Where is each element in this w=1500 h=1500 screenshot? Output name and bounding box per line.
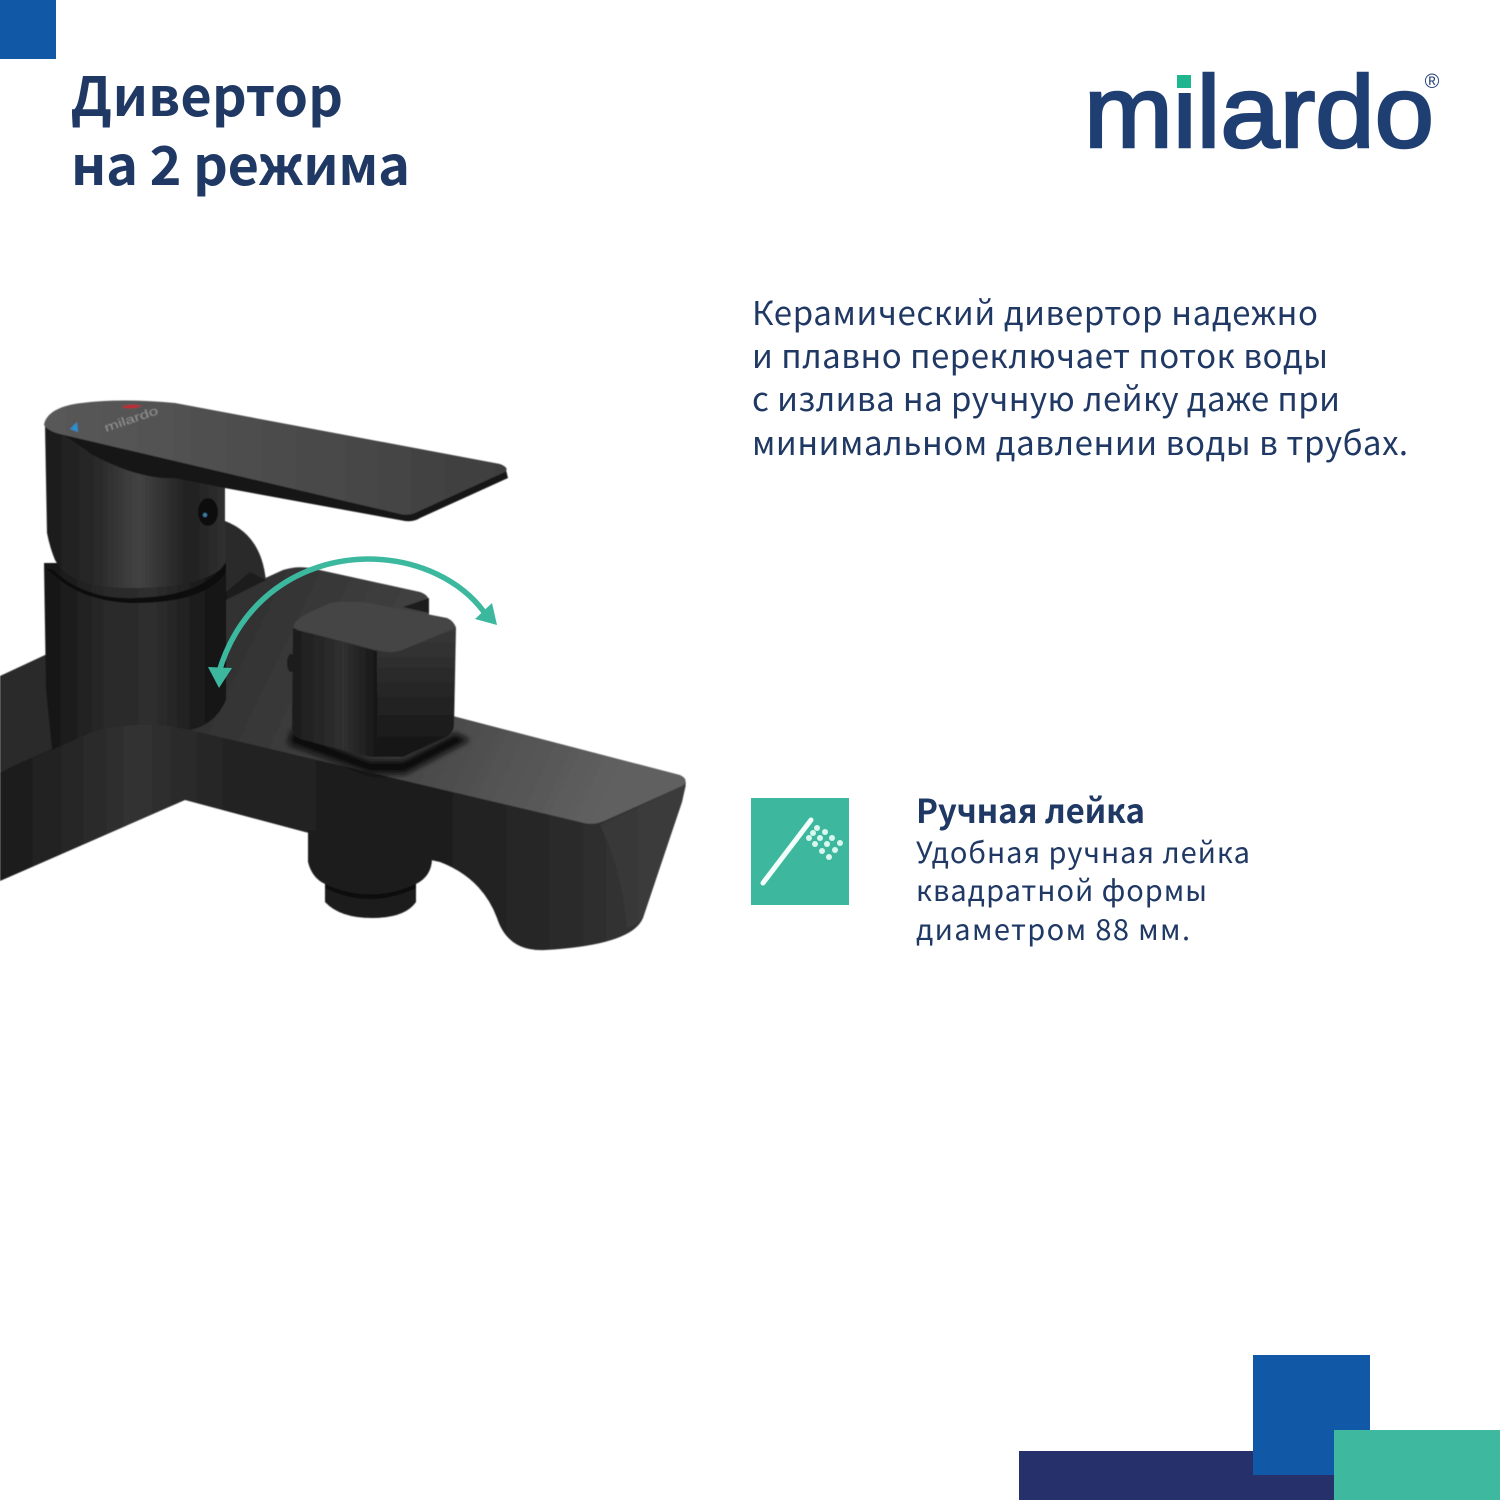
left arm top surface [0, 640, 226, 772]
lever underside [60, 432, 508, 521]
feature heading: Ручная лейка [916, 785, 1145, 833]
knob right face [377, 627, 456, 757]
knob stem [287, 654, 295, 672]
description text: минимальном давлении воды в трубах. [752, 417, 1408, 465]
title: на 2 режима [71, 122, 410, 201]
knob top [293, 602, 456, 652]
description text: и плавно переключает поток воды [752, 330, 1328, 378]
lever top [44, 400, 507, 515]
feature text [916, 830, 1250, 949]
spout underside stub [308, 830, 432, 918]
corner square: top left [0, 0, 56, 59]
description text: с излива на ручную лейку даже при [752, 373, 1340, 421]
knob left face [292, 628, 378, 757]
spout right facet [600, 785, 686, 928]
logo: milardo: milardo [1084, 55, 1434, 169]
title [71, 53, 410, 201]
logo: milardo: ® [1425, 71, 1440, 93]
feature text: квадратной формы [916, 868, 1207, 910]
faucet illustration [0, 400, 686, 950]
corner blocks: bottom right [1019, 1355, 1500, 1500]
description text [752, 287, 1408, 465]
spout and arm front face [0, 722, 686, 950]
upper handle column [45, 425, 225, 588]
red and blue marks [121, 405, 142, 408]
spout top surface [190, 567, 686, 824]
lever logo: milardo [102, 403, 160, 435]
wall escutcheon [225, 521, 266, 610]
feature text: диаметром 88 мм. [916, 907, 1190, 949]
title: Дивертор [71, 53, 343, 132]
teal double arrow [208, 559, 497, 688]
plate notch [403, 598, 429, 613]
lower cylinder [44, 563, 226, 750]
icon: hand shower [751, 798, 849, 905]
hole [198, 498, 218, 526]
feature text: Удобная ручная лейка [916, 830, 1250, 872]
description text: Керамический дивертор надежно [752, 287, 1318, 335]
knob shadow [288, 730, 470, 774]
collar [46, 562, 226, 603]
